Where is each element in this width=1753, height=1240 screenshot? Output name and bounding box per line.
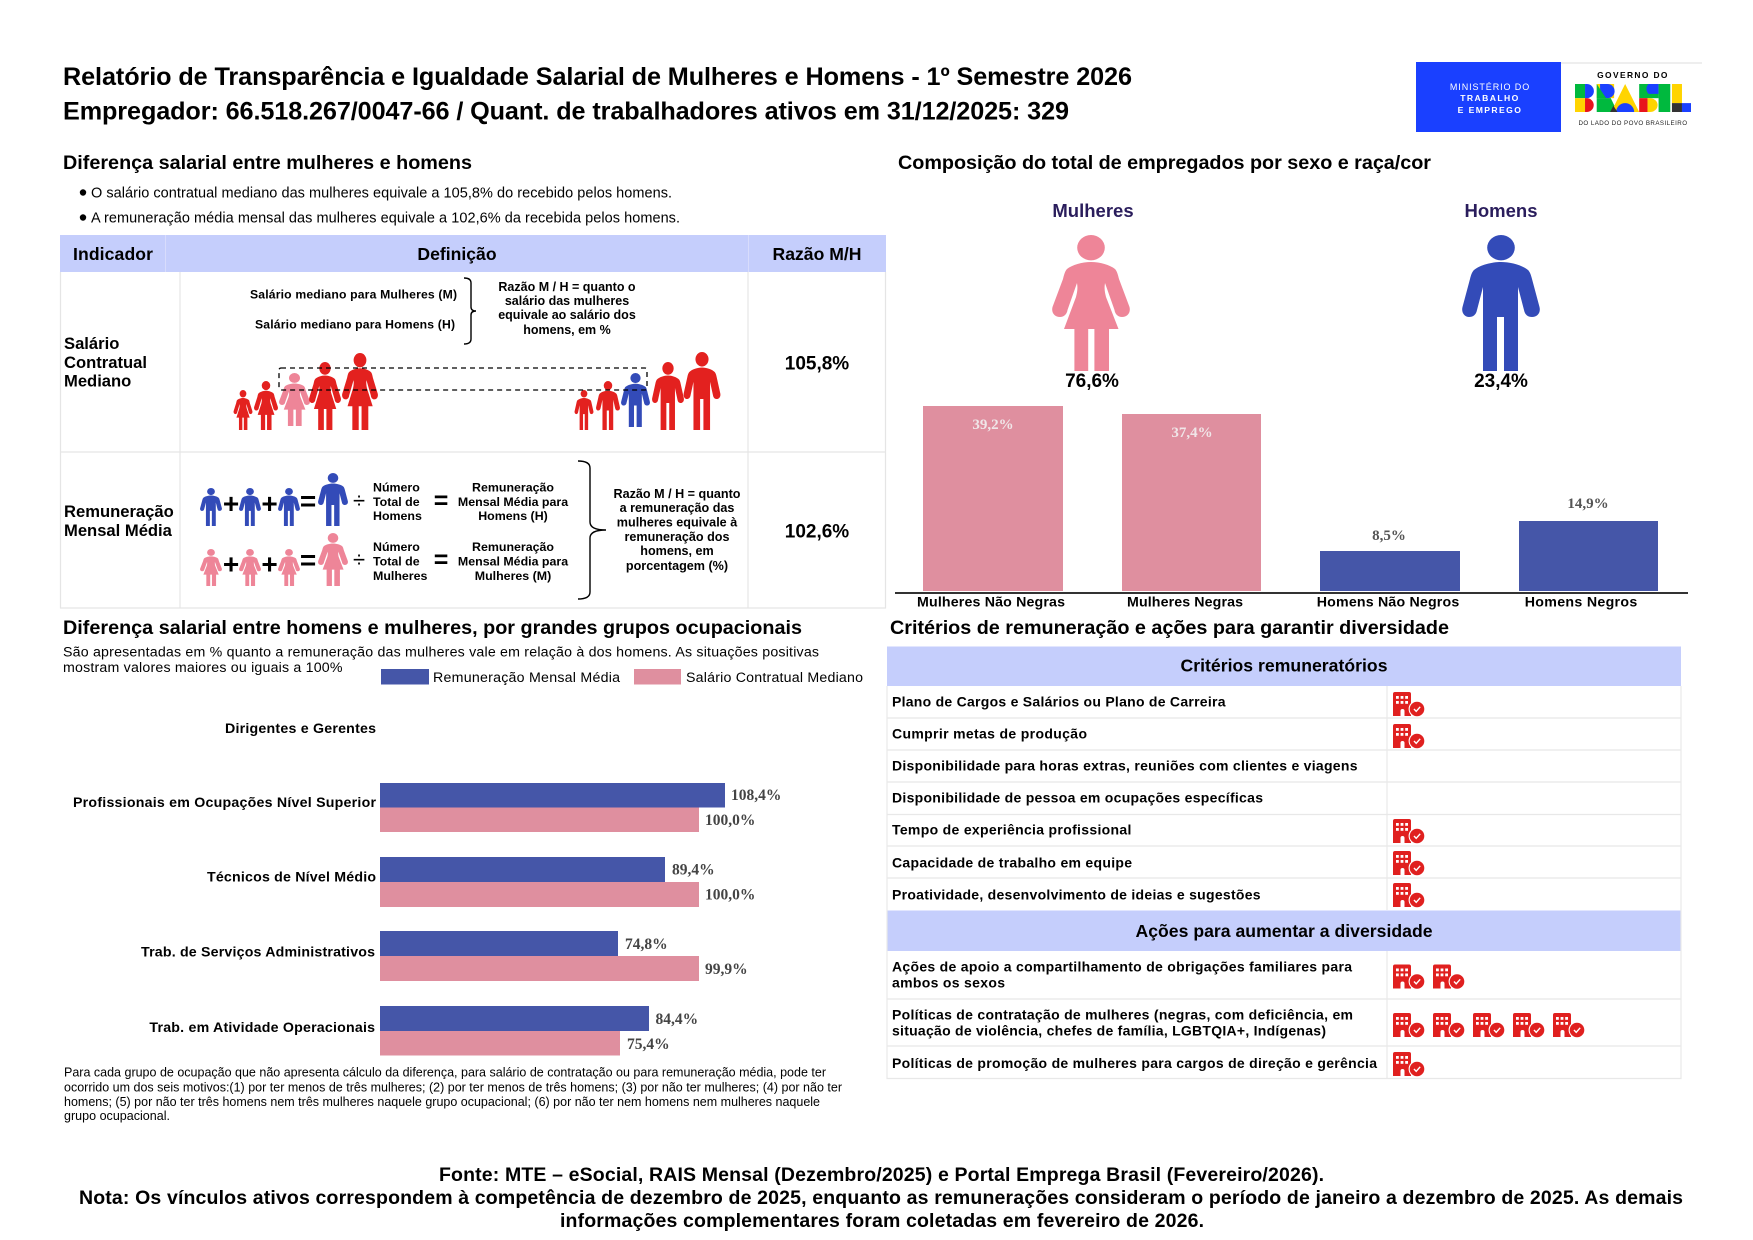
median highlight: dashed box — [279, 368, 647, 390]
footnote: ocorrido um dos seis motivos:(1) por ter menos de três mulheres; (2) por ter menos de três homens; (3) por não ter mulheres; (4) por não ter — [64, 1080, 842, 1094]
panel: indicator table — [60, 235, 886, 608]
mean ratio explanation: Razão M / H = quanto — [614, 487, 741, 501]
category labels: Trab. em Atividade Operacionais — [149, 1020, 375, 1036]
mean ratio explanation: homens, em — [640, 544, 714, 558]
formula: men: Homens (H) — [478, 509, 548, 523]
bar values: 100,0% — [705, 886, 755, 904]
formula: men: ÷ — [353, 488, 365, 513]
value: 102,6%: 102,6% — [785, 522, 849, 542]
formula: men: + — [223, 488, 239, 519]
pictogram: women: 76,6% — [1065, 371, 1119, 392]
footnote — [64, 1066, 842, 1123]
logo: ministério and governo do brasil — [1416, 62, 1702, 132]
formula: men: Número — [373, 480, 420, 494]
brace: median — [464, 278, 476, 344]
formula: women: Número — [373, 540, 420, 554]
bar category labels — [917, 594, 1637, 610]
bullet text: A remuneração média mensal das mulheres equivale a 102,6% da recebida pelos homens. — [91, 210, 680, 226]
category labels: Profissionais em Ocupações Nível Superior — [73, 795, 376, 811]
formula: women — [200, 533, 568, 586]
formula: men: + — [261, 488, 278, 519]
horizontal bar chart: occupational groups — [73, 721, 781, 1056]
title: Relatório de Transparência e Igualdade Salarial de Mulheres e Homens - 1º Semestre 2026 — [63, 63, 1132, 91]
category labels: Dirigentes e Gerentes — [225, 721, 376, 737]
median salary definition text — [250, 288, 457, 332]
bar values: 39,2% — [972, 417, 1014, 433]
criteria labels: Tempo de experiência profissional — [892, 822, 1131, 838]
formula: women: = — [300, 544, 316, 576]
row label: remuneração mensal média: Mensal Média — [64, 521, 173, 540]
icons: company check marks — [1393, 692, 1585, 1077]
formula: women: = — [434, 546, 448, 574]
row label: salário contratual mediano — [64, 334, 147, 390]
bar values: 99,9% — [705, 961, 748, 978]
footnote: Para cada grupo de ocupação que não apresenta cálculo da diferença, para salário de contratação ou para remuneração média, pode ter — [64, 1066, 826, 1080]
category labels: Trab. de Serviços Administrativos — [141, 944, 375, 960]
table header: Razão M/H — [773, 244, 861, 264]
formula: women: + — [261, 548, 278, 580]
logo: ministério and governo do brasil: GOVERNO DO — [1597, 70, 1669, 80]
pictogram: women — [1052, 200, 1134, 392]
category labels — [73, 721, 376, 1036]
pictogram: men: 23,4% — [1474, 371, 1528, 392]
bar values: 14,9% — [1567, 496, 1609, 512]
description text — [63, 644, 819, 676]
legend — [381, 669, 863, 686]
bar values: 89,4% — [672, 862, 715, 878]
bar category labels: Mulheres Não Negras — [917, 594, 1065, 610]
mean ratio explanation: a remuneração das — [620, 501, 734, 515]
table header: Indicador — [73, 244, 153, 264]
formula: men: = — [434, 487, 448, 515]
description text: São apresentadas em % quanto a remuneração das mulheres vale em relação à dos homens. As situações positivas — [63, 644, 819, 660]
median ratio explanation: salário das mulheres — [505, 294, 629, 308]
logo: ministério and governo do brasil: E EMPREGO — [1458, 105, 1522, 115]
footer: source and note — [79, 1164, 1683, 1232]
formula: men: Remuneração — [472, 480, 554, 494]
row label: remuneração mensal média: Remuneração — [64, 502, 174, 521]
table header — [73, 244, 861, 264]
pictogram: men — [1462, 200, 1540, 392]
criteria labels: Disponibilidade para horas extras, reuniões com clientes e viagens — [892, 758, 1358, 774]
logo: ministério and governo do brasil: DO LADO DO POVO BRASILEIRO — [1578, 120, 1688, 127]
mean ratio explanation: remuneração dos — [624, 530, 730, 544]
heading: critérios: Critérios de remuneração e ações para garantir diversidade — [890, 617, 1449, 639]
pictogram: women: Mulheres — [1052, 200, 1134, 221]
formula: men — [200, 473, 568, 526]
legend: Remuneração Mensal Média — [433, 670, 620, 686]
logo: ministério and governo do brasil: MINISTÉRIO DO — [1450, 82, 1530, 92]
section header: ações: Ações para aumentar a diversidade — [1136, 921, 1433, 941]
formula: men: Homens — [373, 509, 422, 523]
footer: source and note: Fonte: MTE – eSocial, RAIS Mensal (Dezembro/2025) e Portal Emprega Brasil (Fevereiro/2026). — [439, 1164, 1324, 1186]
bar values — [972, 417, 1609, 544]
formula: women: Remuneração — [472, 540, 554, 554]
title — [63, 63, 1132, 126]
action labels: situação de violência, chefes de família, LGBTQIA+, Indígenas) — [892, 1022, 1326, 1038]
median ratio explanation: homens, em % — [523, 323, 611, 337]
bar values: 37,4% — [1171, 425, 1213, 441]
bar category labels: Homens Não Negros — [1317, 594, 1459, 610]
criteria labels — [892, 694, 1358, 902]
icons: women ordered by salary — [234, 353, 378, 430]
median ratio explanation — [498, 280, 636, 337]
formula: men: = — [300, 486, 316, 516]
median ratio explanation: Razão M / H = quanto o — [498, 280, 636, 294]
description text: mostram valores maiores ou iguais a 100% — [63, 660, 343, 676]
section header: critérios remuneratórios: Critérios remuneratórios — [1180, 656, 1388, 676]
formula: women: Mensal Média para — [458, 554, 568, 568]
formula: women: ÷ — [353, 547, 365, 572]
action labels: Políticas de contratação de mulheres (negras, com deficiência, em — [892, 1006, 1353, 1022]
row label: salário contratual mediano: Contratual — [64, 353, 147, 372]
bar values: 84,4% — [656, 1011, 698, 1028]
formula: women: + — [223, 548, 239, 580]
bar values: 108,4% — [731, 787, 781, 804]
row label: salário contratual mediano: Mediano — [64, 372, 131, 390]
formula: women: Total de — [373, 554, 420, 568]
row label: salário contratual mediano: Salário — [64, 334, 119, 353]
bars — [380, 783, 725, 1031]
criteria labels: Plano de Cargos e Salários ou Plano de Carreira — [892, 694, 1226, 710]
median ratio explanation: equivale ao salário dos — [498, 308, 636, 322]
criteria labels: Proatividade, desenvolvimento de ideias e sugestões — [892, 886, 1261, 902]
footnote: homens; (5) por não ter três homens nem três mulheres naquele grupo ocupacional; (6) por não ter nem homens nem mulheres naquele — [64, 1095, 820, 1109]
criteria labels: Disponibilidade de pessoa em ocupações específicas — [892, 790, 1263, 806]
formula: women: Mulheres (M) — [475, 569, 551, 583]
pictogram: men: Homens — [1464, 200, 1538, 221]
formula: women: Mulheres — [373, 569, 428, 583]
legend: Salário Contratual Mediano — [686, 670, 863, 686]
action labels: Políticas de promoção de mulheres para cargos de direção e gerência — [892, 1055, 1377, 1071]
heading: composição: Composição do total de empregados por sexo e raça/cor — [898, 152, 1431, 174]
formula: men: Mensal Média para — [458, 495, 568, 509]
footnote: grupo ocupacional. — [64, 1109, 170, 1123]
bar values: 75,4% — [627, 1036, 670, 1053]
formula: men: Total de — [373, 495, 420, 509]
bar chart: employees by sex and race — [895, 406, 1688, 610]
bar values: 74,8% — [625, 936, 668, 953]
logo: ministério and governo do brasil: TRABALHO — [1460, 93, 1520, 103]
median salary definition text: Salário mediano para Homens (H) — [255, 318, 455, 332]
footer: source and note: informações complementares foram coletadas em fevereiro de 2026. — [560, 1210, 1204, 1232]
value: 105,8%: 105,8% — [785, 354, 849, 374]
heading: diferença salarial: Diferença salarial entre mulheres e homens — [63, 152, 472, 174]
bar category labels: Mulheres Negras — [1127, 594, 1243, 610]
mean ratio explanation: porcentagem (%) — [626, 559, 728, 573]
bar values — [625, 787, 781, 1053]
mean ratio explanation — [614, 487, 741, 573]
criteria labels: Capacidade de trabalho em equipe — [892, 854, 1132, 870]
table header: Definição — [417, 244, 497, 264]
bar values: 100,0% — [705, 812, 755, 829]
mean ratio explanation: mulheres equivale à — [617, 516, 738, 530]
brace: mean — [578, 461, 606, 599]
criteria labels: Cumprir metas de produção — [892, 726, 1087, 742]
title: Empregador: 66.518.267/0047-66 / Quant. de trabalhadores ativos em 31/12/2025: 329 — [63, 98, 1069, 126]
panel: criteria table — [887, 646, 1681, 1078]
bullet text: O salário contratual mediano das mulheres equivale a 105,8% do recebido pelos homens. — [91, 186, 672, 202]
icons: men ordered by salary — [575, 352, 720, 430]
bullet text — [80, 186, 680, 226]
action labels: Ações de apoio a compartilhamento de obrigações familiares para — [892, 958, 1352, 974]
footer: source and note: Nota: Os vínculos ativos correspondem à competência de dezembro de 2025, enquanto as remunerações consideram o período de janeiro a dezembro de 2025. As demais — [79, 1187, 1683, 1209]
heading: occupational groups: Diferença salarial entre homens e mulheres, por grandes grupos ocupacionais — [63, 617, 802, 639]
bar values: 8,5% — [1372, 528, 1406, 544]
category labels: Técnicos de Nível Médio — [207, 870, 376, 886]
row label: remuneração mensal média — [64, 502, 174, 540]
bar category labels: Homens Negros — [1525, 594, 1637, 610]
action labels: ambos os sexos — [892, 974, 1005, 990]
median salary definition text: Salário mediano para Mulheres (M) — [250, 288, 457, 302]
action labels — [892, 958, 1377, 1071]
